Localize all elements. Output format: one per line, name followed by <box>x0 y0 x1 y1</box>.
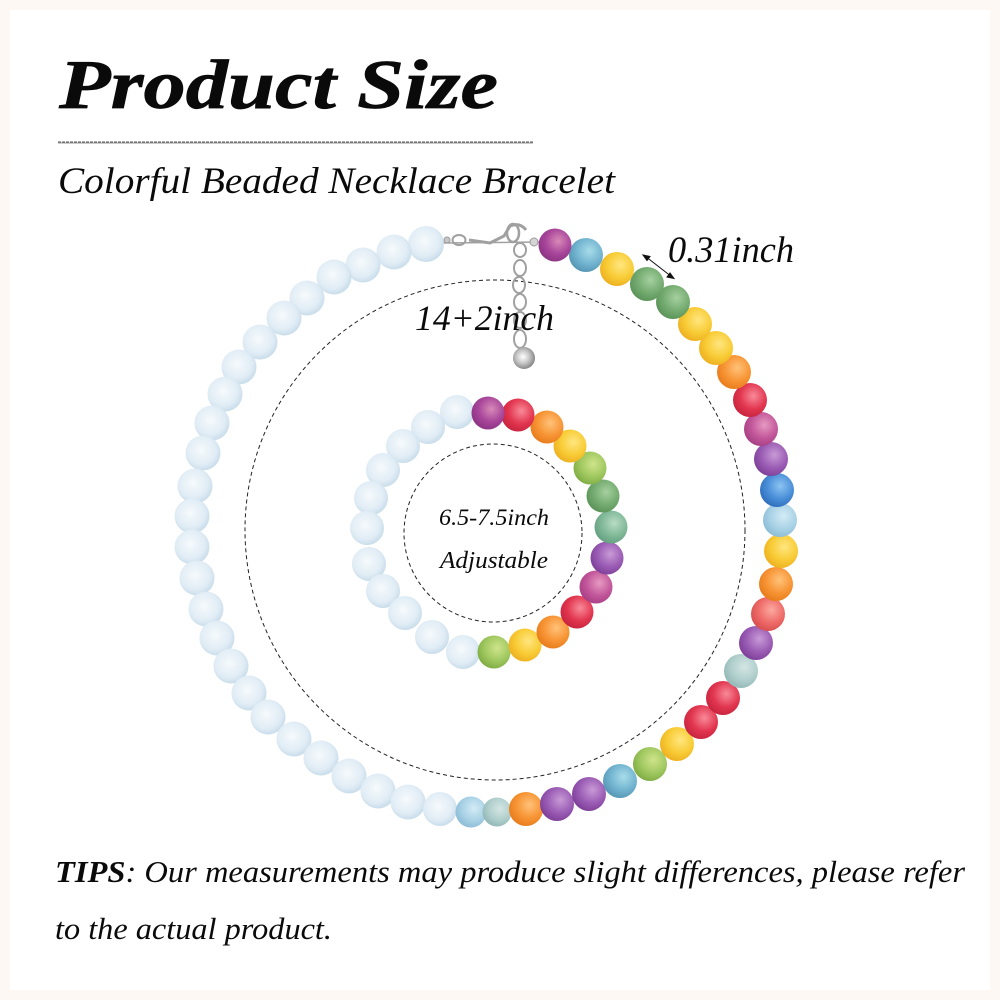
subtitle: Colorful Beaded Necklace Bracelet <box>58 161 617 202</box>
title underline <box>58 142 533 143</box>
necklace length label: 14+2inch <box>415 298 554 338</box>
extender ball charm <box>513 347 535 369</box>
tips line 1: TIPS: Our measurements may produce slight differences, please refer <box>55 854 966 889</box>
adjustable label: Adjustable <box>438 548 548 574</box>
necklace length dashed circle <box>245 280 745 780</box>
bracelet size dashed circle <box>404 444 582 622</box>
bracelet length label: 6.5-7.5inch <box>439 505 549 530</box>
bracelet beads <box>350 395 628 669</box>
tips line 2: to the actual product. <box>55 911 332 946</box>
bead size label: 0.31inch <box>668 230 794 271</box>
title: Product Size <box>58 47 498 124</box>
necklace beads <box>174 226 798 828</box>
bead size arrow <box>643 255 674 278</box>
clasp and extender chain <box>442 224 540 348</box>
